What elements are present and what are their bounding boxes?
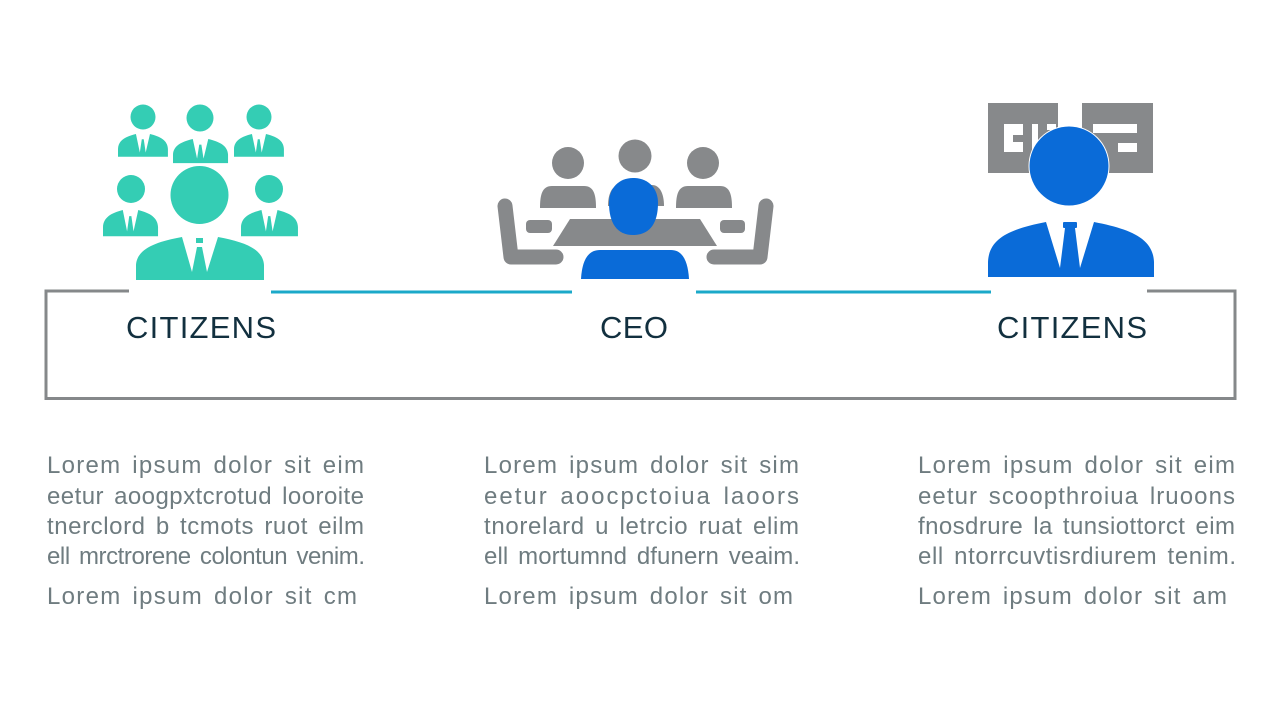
text block: right column: eetur scoopthroiua lruoons — [918, 483, 1235, 510]
text block: middle column: eetur aoocpctoiua laoors — [484, 483, 799, 510]
connector: left blue line — [271, 290, 572, 294]
heading: citizens left: CITIZENS — [126, 310, 276, 345]
text block: left column — [47, 452, 365, 610]
text block: right column — [918, 452, 1236, 610]
text block: right column: Lorem ipsum dolor sit eim — [918, 452, 1235, 479]
heading: CEO: CEO — [600, 310, 668, 345]
icon: group of citizens — [103, 104, 298, 280]
text block: left column: eetur aoogpxtcrotud looroite — [47, 483, 364, 510]
icon: CEO at meeting table — [505, 140, 766, 279]
text block: left column: Lorem ipsum dolor sit eim — [47, 452, 364, 479]
frame: outlined panel — [46, 291, 1235, 398]
icon: citizen with speech panels — [988, 103, 1154, 277]
text block: left column: Lorem ipsum dolor sit cm — [47, 583, 357, 610]
text block: left column: ell mrctrorene colontun venim. — [47, 543, 365, 570]
text block: middle column: Lorem ipsum dolor sit om — [484, 583, 793, 610]
text block: middle column: ell mortumnd dfunern veaim. — [484, 543, 800, 570]
text block: right column: ell ntorrcuvtisrdiurem tenim. — [918, 543, 1236, 570]
text block: left column: tnerclord b tcmots ruot eilm — [47, 513, 364, 540]
text block: middle column: Lorem ipsum dolor sit sim — [484, 452, 799, 479]
heading: citizens right: CITIZENS — [997, 310, 1147, 345]
text block: middle column — [484, 452, 800, 610]
text block: middle column: tnorelard u letrcio ruat elim — [484, 513, 799, 540]
connector: right blue line — [696, 290, 991, 294]
text block: right column: fnosdrure la tunsiottorct eim — [918, 513, 1235, 540]
text block: right column: Lorem ipsum dolor sit am — [918, 583, 1227, 610]
